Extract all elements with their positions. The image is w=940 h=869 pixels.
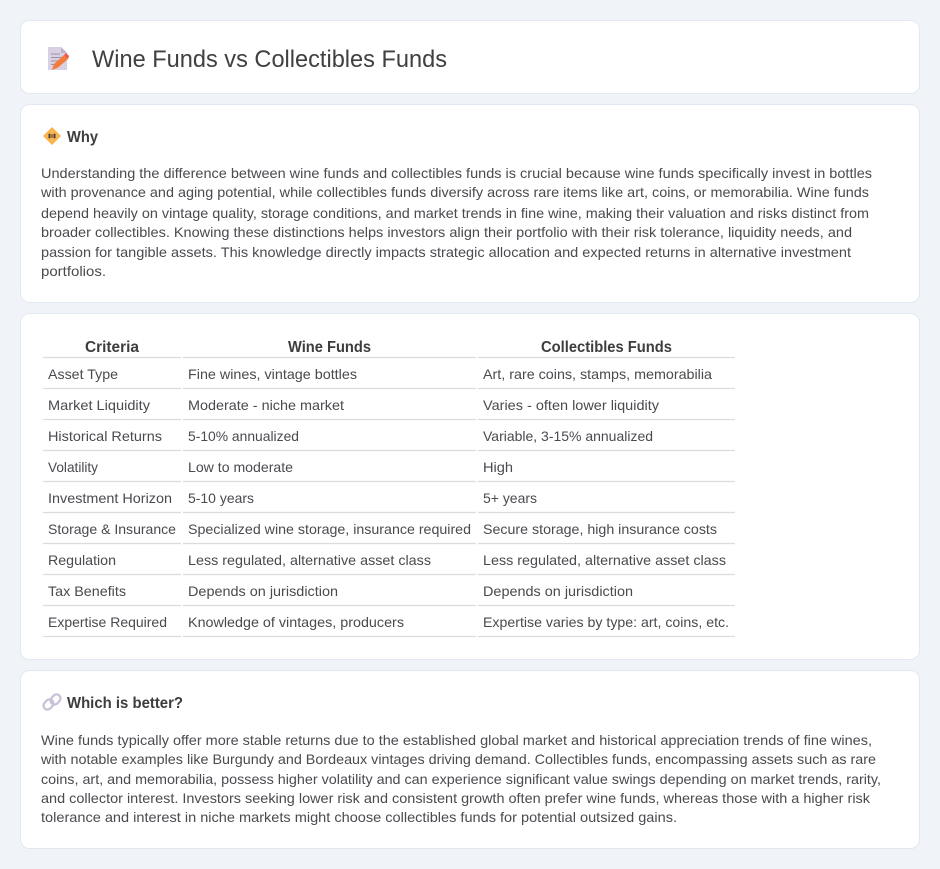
row: tax benefits: Depends on jurisdiction: [188, 583, 338, 599]
row: storage and insurance: Storage & Insurance: [48, 521, 176, 537]
row: historical returns: Variable, 3-15% annualized: [483, 428, 653, 444]
row: expertise required: [48, 614, 729, 630]
row: asset type: Art, rare coins, stamps, memorabilia: [483, 366, 712, 382]
table header row: Wine Funds: [288, 339, 371, 356]
row: expertise required: Knowledge of vintages, producers: [188, 614, 404, 630]
row: regulation: Regulation: [48, 552, 116, 568]
text block: which is better paragraph: [40, 732, 881, 825]
panel: comparison table: [20, 314, 920, 660]
heading: which is better: Which is better?: [67, 695, 183, 712]
row: regulation: Less regulated, alternative asset class: [483, 552, 726, 568]
row: historical returns: [48, 428, 653, 444]
row: asset type: [48, 366, 712, 382]
row: investment horizon: 5+ years: [483, 490, 537, 506]
text block: which is better paragraph: tolerance and interest in niche markets might choose collectibles funds for potential outsized gains.: [41, 809, 677, 825]
row: market liquidity: Moderate - niche market: [188, 397, 344, 413]
row: tax benefits: Depends on jurisdiction: [483, 583, 633, 599]
text block: why paragraph: portfolios.: [41, 263, 106, 279]
icon: diamond warning sign: [44, 128, 60, 144]
icon: chain link: [42, 693, 62, 711]
heading: why: Why: [67, 129, 98, 146]
text block: why paragraph: with provenance and aging potential, while collectibles funds diversify across rare items like art, coins, or memorabilia. Wine funds: [40, 184, 869, 200]
panel: header: [20, 20, 920, 94]
panel: which is better: [20, 670, 920, 848]
row: volatility: Volatility: [48, 459, 98, 475]
row: market liquidity: [48, 397, 659, 413]
row: regulation: [48, 552, 726, 568]
row: storage and insurance: [48, 521, 717, 537]
row: tax benefits: [48, 583, 633, 599]
text block: which is better paragraph: coins, art, and memorabilia, possess higher volatility and can experience significant value swings depending on market trends, rarity,: [41, 771, 881, 787]
text block: why paragraph: depend heavily on vintage quality, storage conditions, and market trends in fine wine, making their valuation and risks distinct from: [41, 205, 869, 221]
row: expertise required: Expertise varies by type: art, coins, etc.: [483, 614, 729, 630]
row: investment horizon: Investment Horizon: [48, 490, 172, 506]
row: investment horizon: 5-10 years: [188, 490, 254, 506]
panel: why: [20, 104, 920, 302]
text block: which is better paragraph: and collector interest. Investors seeking lower risk and consistent growth often prefer wine funds, whereas those with a higher risk: [41, 790, 871, 806]
row: market liquidity: Varies - often lower liquidity: [483, 397, 659, 413]
text block: why paragraph: broader collectibles. Knowing these distinctions helps investors align their portfolio with their risk tolerance, liquidity needs, and: [41, 224, 852, 240]
row: investment horizon: [48, 490, 537, 506]
row: volatility: Low to moderate: [188, 459, 293, 475]
row: asset type: Fine wines, vintage bottles: [188, 366, 357, 382]
row: storage and insurance: Secure storage, high insurance costs: [483, 521, 717, 537]
icon: document with pencil: [48, 47, 69, 70]
row: historical returns: 5-10% annualized: [188, 428, 299, 444]
row: market liquidity: Market Liquidity: [48, 397, 150, 413]
row: regulation: Less regulated, alternative asset class: [188, 552, 431, 568]
text block: which is better paragraph: Wine funds typically offer more stable returns due to the established global market and historical appreciation trends of fine wines,: [41, 732, 872, 748]
table header row: Criteria: [85, 339, 139, 356]
row: expertise required: Expertise Required: [48, 614, 167, 630]
table header row: [85, 339, 672, 356]
text block: why paragraph: Understanding the difference between wine funds and collectibles funds is crucial because wine funds specifically invest in bottles: [41, 165, 872, 181]
row: storage and insurance: Specialized wine storage, insurance required: [188, 521, 471, 537]
table header row: Collectibles Funds: [541, 339, 672, 356]
text block: why paragraph: [40, 165, 872, 279]
text block: which is better paragraph: with notable examples like Burgundy and Bordeaux vintages driving demand. Collectibles funds, encompassing assets such as rare: [40, 751, 876, 767]
row: tax benefits: Tax Benefits: [48, 583, 126, 599]
row: asset type: Asset Type: [48, 366, 118, 382]
title: Wine Funds vs Collectibles Funds: [92, 46, 447, 73]
row: volatility: High: [483, 459, 513, 475]
text block: why paragraph: passion for tangible assets. This knowledge directly impacts strategic allocation and expected returns in alternative investment: [41, 244, 851, 260]
row: volatility: [48, 459, 513, 475]
row: historical returns: Historical Returns: [48, 428, 162, 444]
